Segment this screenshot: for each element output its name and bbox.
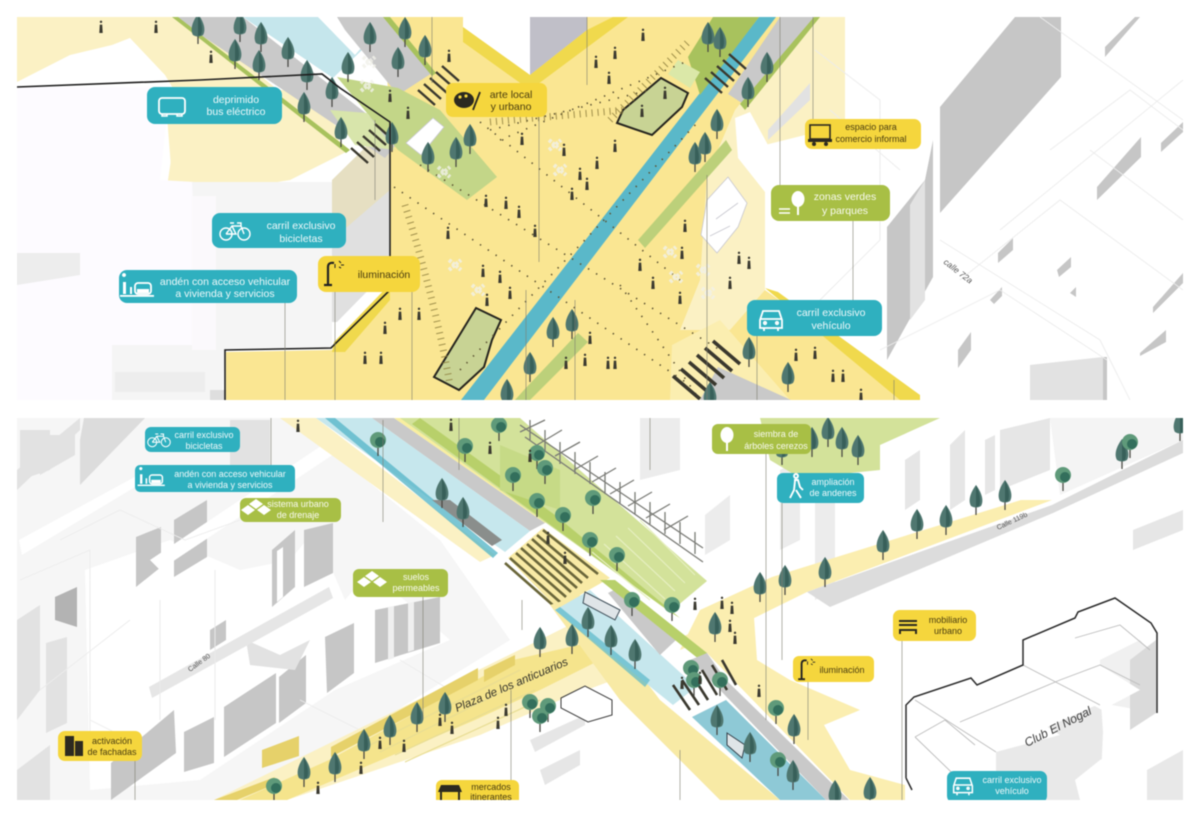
leader lines bottom — [135, 418, 902, 800]
NW road with channel — [172, 17, 497, 200]
stair edge marks — [405, 40, 690, 385]
label: carril exclusivo bicicletas (bottom) — [145, 427, 240, 452]
trees — [192, 12, 794, 412]
label: carril exclusivo bicicletas: carril exclusivo — [267, 220, 336, 232]
label: sistema urbano de drenaje: de drenaje — [277, 510, 319, 520]
pedestrians bottom panel — [296, 419, 761, 794]
label: siembra de árboles cerezos: siembra de — [754, 429, 798, 439]
street name: Calle 80: Calle 80 — [187, 653, 212, 674]
label: carril exclusivo vehículo: vehículo — [811, 320, 851, 332]
pale plaza right of road — [685, 618, 906, 800]
side street: calle 119b — [680, 440, 1183, 650]
icon: market cart — [808, 125, 832, 146]
label: siembra de árboles cerezos: árboles cerezos — [744, 441, 808, 451]
buildings on the right — [768, 17, 1183, 400]
label: iluminación (bottom): iluminación — [819, 665, 865, 675]
leader lines — [285, 17, 894, 400]
buildings below the black outline — [17, 122, 390, 400]
main road south section — [550, 580, 849, 800]
NE road and green edges — [515, 17, 820, 400]
label: suelos permeables: suelos — [403, 572, 430, 582]
label: carril exclusivo vehículo — [747, 300, 882, 336]
label: suelos permeables — [353, 569, 448, 597]
seating flowers — [361, 57, 714, 298]
label: arte local y urbano: arte local — [490, 89, 532, 101]
black boundary line — [17, 74, 390, 400]
building name: Club El Nogal — [1022, 704, 1094, 750]
label: mobiliario urbano: urbano — [934, 626, 962, 636]
label: andén con acceso vehicular (bottom) — [135, 465, 295, 492]
street name: calle 72a: calle 72a — [942, 257, 975, 286]
label: deprimido bus eléctrico — [147, 87, 282, 124]
plaza street title: Plaza de los anticuarios — [453, 656, 570, 715]
label: arte local y urbano — [446, 83, 547, 117]
label: zonas verdes y parques: zonas verdes — [814, 191, 876, 203]
label: mobiliario urbano: mobiliario — [929, 615, 967, 625]
main road north section — [280, 418, 707, 618]
top axonometric panel: intersection plaza — [17, 12, 1183, 412]
label: mercados itinerantes: itinerantes — [470, 792, 512, 802]
label: mercados itinerantes — [435, 779, 520, 801]
label: iluminación: iluminación — [358, 269, 410, 281]
label: iluminación — [318, 256, 420, 292]
label: ampliación de andenes: ampliación — [811, 477, 855, 487]
label: zonas verdes y parques — [771, 185, 890, 221]
label: carril exclusivo vehículo (bottom): vehículo — [995, 786, 1029, 796]
label: carril exclusivo vehículo: carril exclusivo — [797, 307, 866, 319]
left block massing — [17, 418, 510, 800]
label: carril exclusivo bicicletas (bottom): bicicletas — [185, 441, 223, 451]
label: andén con acceso vehicular: a vivienda y servicios — [175, 288, 275, 300]
pergola structure — [520, 420, 703, 562]
label: activación de fachadas — [58, 731, 142, 761]
label: andén con acceso vehicular (bottom): andén con acceso vehicular — [174, 469, 286, 479]
label: ampliación de andenes — [777, 473, 864, 503]
label: deprimido bus eléctrico: bus eléctrico — [207, 106, 266, 118]
label: espacio para comercio informal: comercio informal — [835, 134, 907, 144]
NE block massing — [640, 418, 1183, 600]
label: zonas verdes y parques: y parques — [822, 205, 868, 217]
label: siembra de árboles cerezos — [712, 424, 811, 454]
dotted paving lines — [394, 60, 720, 400]
icon: walking person — [790, 474, 803, 498]
label: activación de fachadas: de fachadas — [87, 747, 137, 757]
icon: facade — [65, 736, 83, 756]
icon: bench — [899, 621, 917, 634]
icon: palette and brush — [454, 92, 480, 110]
outline building: Club El Nogal — [906, 598, 1183, 800]
label: mobiliario urbano — [893, 610, 976, 641]
icon: market stall — [438, 785, 462, 802]
pedestrians — [99, 21, 863, 401]
label: espacio para comercio informal — [805, 119, 921, 149]
label: carril exclusivo bicicletas (bottom): carril exclusivo — [174, 430, 234, 440]
crosswalks — [351, 54, 746, 399]
label: andén con acceso vehicular (bottom): a vivienda y servicios — [187, 480, 273, 490]
label: sistema urbano de drenaje — [240, 498, 341, 522]
label: carril exclusivo bicicletas: bicicletas — [279, 233, 323, 245]
label: suelos permeables: permeables — [392, 583, 440, 593]
label: espacio para comercio informal: espacio para — [845, 122, 897, 132]
label: carril exclusivo vehículo (bottom): carril exclusivo — [982, 775, 1042, 785]
label: activación de fachadas: activación — [92, 736, 132, 746]
white canopies — [406, 118, 747, 253]
label: carril exclusivo vehículo (bottom) — [947, 771, 1047, 803]
label: sistema urbano de drenaje: sistema urbano — [267, 499, 329, 509]
central teal lane — [461, 17, 776, 400]
Plaza de los anticuarios street — [214, 626, 614, 801]
trees bottom panel — [266, 411, 1186, 810]
central crossing — [505, 528, 610, 608]
side street: calle 119b: Calle 119b — [996, 511, 1029, 532]
label: deprimido bus eléctrico: deprimido — [213, 94, 259, 106]
label: ampliación de andenes: de andenes — [809, 488, 857, 498]
label: arte local y urbano: y urbano — [491, 101, 532, 113]
bottom axonometric panel: road and Plaza de los anticuarios — [17, 411, 1186, 810]
label: mercados itinerantes: mercados — [471, 782, 511, 792]
label: andén con acceso vehicular: andén con acceso vehicular — [160, 276, 291, 288]
green outlined patches — [434, 78, 688, 390]
plaza paving — [226, 17, 920, 400]
label: andén con acceso vehicular — [119, 270, 297, 303]
label: iluminación (bottom) — [793, 656, 874, 682]
label: carril exclusivo bicicletas — [212, 213, 346, 248]
